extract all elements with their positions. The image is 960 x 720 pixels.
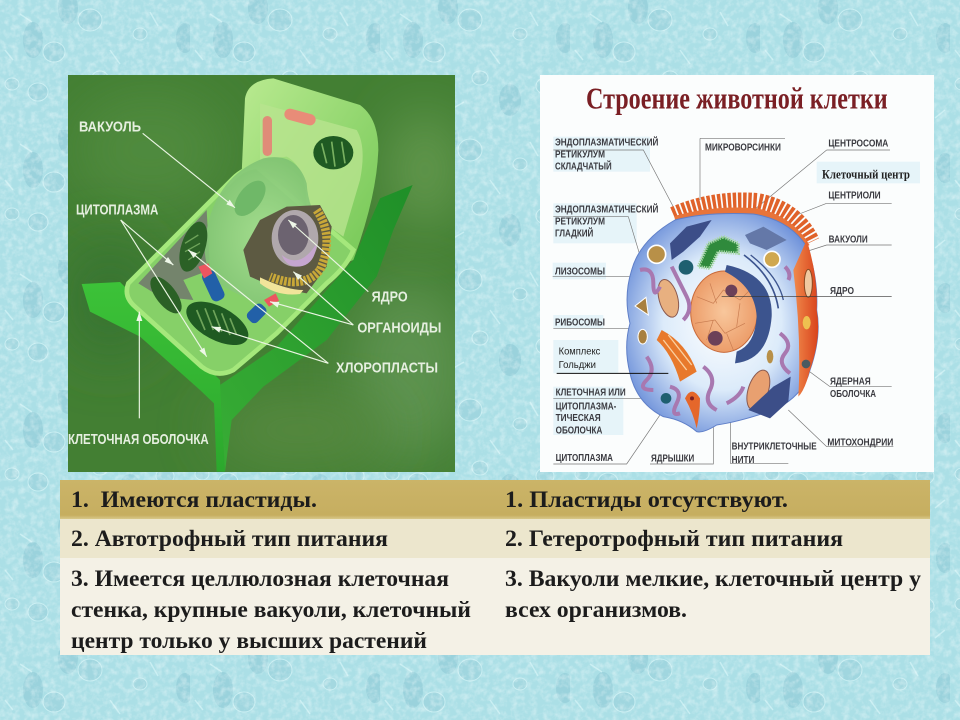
label: vacuole: ВАКУОЛЬ (79, 119, 141, 136)
text: plant cell wall and vacuoles (71, 566, 471, 653)
label: centrosome: ЦЕНТРОСОМА (828, 139, 889, 150)
icon: nucleolus fold (685, 392, 700, 428)
label: cell membrane: КЛЕТОЧНАЯ ИЛИ (556, 388, 626, 399)
label: nuclear envelope: ЯДЕРНАЯ (830, 376, 871, 387)
icon: lower ER (748, 377, 791, 418)
label: nucleus: ЯДРО (372, 288, 408, 305)
label: nucleoli: ЯДРЫШКИ (651, 454, 694, 465)
icon: cell wall right flap (220, 185, 413, 472)
arrow: vacuole (143, 133, 235, 208)
label: mitochondria: МИТОХОНДРИИ (827, 438, 893, 449)
arrows: leader lines (121, 133, 368, 418)
text: plant cell wall and vacuoles: стенка, крупные вакуоли, клеточный (71, 597, 471, 622)
icon: centrosome green body (698, 237, 738, 268)
label: cytoplasm: ЦИТОПЛАЗМА (76, 202, 158, 219)
arrow: cell wall (138, 312, 140, 418)
arrowheads (136, 200, 302, 357)
label: intracellular filaments: ВНУТРИКЛЕТОЧНЫЕ (732, 442, 817, 453)
label: smooth ER: ГЛАДКИЙ (555, 226, 593, 239)
label: cell membrane: ЦИТОПЛАЗМА- (556, 401, 617, 412)
text: animal vacuoles and cell centre: всех организмов. (505, 597, 687, 622)
panel: animal cell illustration (540, 75, 934, 472)
label: lysosomes: ЛИЗОСОМЫ (555, 266, 605, 277)
label: ribosomes: РИБОСОМЫ (555, 317, 605, 328)
icon: chloroplast on back wall (313, 136, 353, 169)
panel: plant cell illustration (60, 75, 470, 472)
label: smooth ER: ЭНДОПЛАЗМАТИЧЕСКИЙ (555, 202, 658, 215)
label: rough ER (555, 136, 658, 173)
text: plastids present: 1. Имеются пластиды. (71, 487, 317, 512)
table row 3 background (60, 558, 930, 655)
label: cytoplasm: ЦИТОПЛАЗМА (556, 453, 613, 464)
icon: chloroplast large (186, 302, 248, 345)
icon: golgi and organelles (243, 205, 332, 293)
icon: blue and red organelles (202, 270, 225, 302)
label: microvilli: МИКРОВОРСИНКИ (705, 142, 781, 153)
label: vacuoles: ВАКУОЛИ (829, 235, 868, 246)
icon: vacuole (205, 157, 323, 303)
text: plant cell wall and vacuoles: 3. Имеется целлюлозная клеточная (71, 566, 449, 591)
label: cell membrane: ОБОЛОЧКА (556, 426, 603, 437)
arrow: cytoplasm 2 (121, 220, 207, 357)
label: nuclear envelope: ОБОЛОЧКА (830, 389, 876, 400)
icon: mitochondria (654, 277, 682, 319)
icon: nucleus (691, 271, 757, 352)
icon: cell wall left flap (82, 282, 225, 472)
text: autotrophic nutrition: 2. Автотрофный тип питания (71, 526, 388, 551)
icon: lysosome squiggles (640, 267, 790, 414)
heading: animal cell structure: Строение животной клетки (586, 82, 888, 116)
label: centrioles: ЦЕНТРИОЛИ (828, 190, 881, 201)
table row 1 background (60, 480, 930, 519)
panel: comparison table (60, 480, 930, 655)
label backgrounds (553, 137, 920, 435)
arrow: nucleus (288, 220, 368, 292)
label: cell membrane: ТИЧЕСКАЯ (556, 413, 601, 424)
plant cell drawing (68, 78, 441, 472)
label: cell membrane (556, 388, 626, 437)
icon: red organelles on back wall (284, 108, 316, 126)
label: Golgi complex: Комплекс (559, 346, 600, 357)
label: nuclear envelope (830, 376, 876, 400)
text: plastids absent: 1. Пластиды отсутствуют. (505, 487, 788, 512)
icon: microvilli base (675, 211, 807, 247)
icon: orange membrane band (793, 240, 818, 397)
icon: nucleus (272, 210, 318, 267)
icon: back wall of the cell (242, 78, 378, 262)
plant cell labels (68, 119, 441, 448)
icon: cell interior (127, 167, 353, 373)
label: organoids: ОРГАНОИДЫ (357, 320, 441, 337)
label: smooth ER: РЕТИКУЛУМ (555, 216, 605, 227)
label: cell wall: КЛЕТОЧНАЯ ОБОЛОЧКА (68, 431, 209, 448)
label: smooth ER (555, 202, 658, 239)
nucleus leader (722, 296, 892, 298)
label: cell centre: Клеточный центр (822, 167, 910, 181)
label: rough ER: СКЛАДЧАТЫЙ (555, 160, 612, 173)
label: intracellular filaments (732, 442, 817, 466)
label: rough ER: ЭНДОПЛАЗМАТИЧЕСКИЙ (555, 136, 658, 149)
arrow: chloroplasts 2 (212, 327, 328, 363)
arrow: cytoplasm 1 (121, 220, 173, 265)
icon: cell body (627, 213, 818, 432)
label: intracellular filaments: НИТИ (732, 455, 754, 466)
text: plant cell wall and vacuoles: центр только у высших растений (71, 628, 427, 653)
text: heterotrophic nutrition: 2. Гетеротрофный тип питания (505, 526, 843, 551)
label: rough ER: РЕТИКУЛУМ (555, 150, 605, 161)
text: animal vacuoles and cell centre: 3. Вакуоли мелкие, клеточный центр у (505, 566, 922, 591)
label: chloroplasts: ХЛОРОПЛАСТЫ (336, 359, 438, 376)
animal cell labels (555, 136, 893, 466)
leader lines (553, 138, 893, 464)
label: nucleus: ЯДРО (830, 286, 854, 297)
icon: microvilli (675, 204, 808, 243)
icon: chloroplast left (150, 276, 182, 314)
icon: grey cytoplasm (138, 210, 210, 300)
animal cell drawing (627, 204, 892, 432)
arrow: organoids 2 (270, 302, 353, 325)
table row 2 background (60, 519, 930, 558)
icon: rough ER around nucleus (725, 265, 772, 363)
icon: vacuoles (648, 245, 666, 263)
arrow: organoids 1 (293, 272, 353, 325)
label: Golgi complex (559, 346, 600, 371)
text: animal vacuoles and cell centre (505, 566, 922, 622)
arrow: chloroplasts 1 (188, 250, 328, 363)
icon: upper ER (670, 220, 712, 260)
label: Golgi complex: Гольджи (559, 360, 596, 371)
icon: chloroplast upper (179, 222, 208, 272)
icon: Golgi complex (657, 330, 697, 382)
icon: inner back wall (260, 103, 363, 237)
